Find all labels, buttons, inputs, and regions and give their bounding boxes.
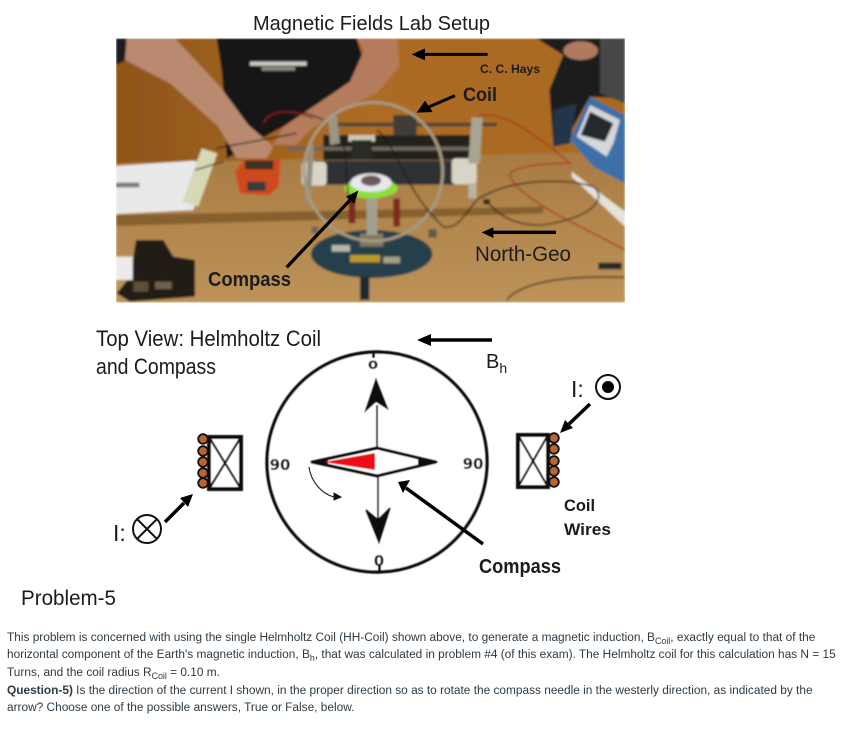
arrow: coil pointer [417,96,455,113]
label: Bh: B [486,351,499,373]
dial marks [270,351,483,573]
photo: lab setup [116,38,625,303]
compass diagram [267,351,487,573]
title: Magnetic Fields Lab Setup [253,12,490,35]
icon: current out of page [596,375,620,399]
problem text: horizontal component of the Earth's magnetic induction, B [7,647,310,661]
arrow: rotation direction [309,467,341,500]
arrow: compass pointer [287,191,358,267]
right coil cross-section [518,435,548,487]
dial marks: 90 [463,455,483,473]
dial marks: o [368,355,378,373]
heading: top view: Top View: Helmholtz Coil [96,326,321,351]
problem text: Coil [655,636,670,646]
needle black tips [310,458,438,466]
left coil cross-section [209,437,241,489]
problem text [7,630,836,714]
compass needle [312,448,436,476]
problem text: , that was calculated in problem #4 (of this exam). The Helmholtz coil for this calculation has N = 15 [315,647,836,661]
label: coil wires: Wires [564,520,611,539]
label: Bh: h [499,360,507,376]
problem text: Coil [152,671,167,681]
arrow: top arrow in photo [412,48,488,60]
dial marks: 0 [374,552,384,570]
south arrow [366,476,390,542]
label: North-Geo: North-Geo [475,243,571,266]
problem text: , exactly equal to that of the [670,630,816,644]
label: Coil: Coil [463,85,497,106]
problem text: arrow? Choose one of the possible answers, True or False, below. [7,700,354,714]
icon: current into page [133,515,161,543]
right coil wires [549,433,559,487]
arrow: compass pointer [398,480,483,544]
problem text: h [310,653,315,663]
problem text: Turns, and the coil radius R [7,665,152,679]
north arrow [366,380,387,448]
dial marks: 90 [270,456,290,474]
heading: problem 5: Problem-5 [21,587,116,610]
compass dial [267,352,487,572]
label: C. C. Hays: C. C. Hays [480,62,540,76]
arrow: north-geo [482,227,556,238]
left coil wires [198,434,208,488]
problem text: = 0.10 m. [167,665,220,679]
label: I right: I: [571,376,584,402]
arrow: Bh direction [417,334,492,346]
label: Compass in photo: Compass [208,269,291,291]
label: compass: Compass [479,556,561,578]
problem text: This problem is concerned with using the single Helmholtz Coil (HH-Coil) shown above, to generate a magnetic induction, B [7,630,655,644]
heading: top view: and Compass [96,354,216,379]
arrow: to left coil wires [165,494,193,522]
label: I left: I: [113,520,126,546]
arrow: to right coil wires [560,404,590,433]
problem text: Question-5) Is the direction of the current I shown, in the proper direction so as to rotate the compass needle in the westerly direction, as indicated by the [7,683,813,697]
label: coil wires: Coil [564,496,595,515]
needle red half [324,453,375,470]
